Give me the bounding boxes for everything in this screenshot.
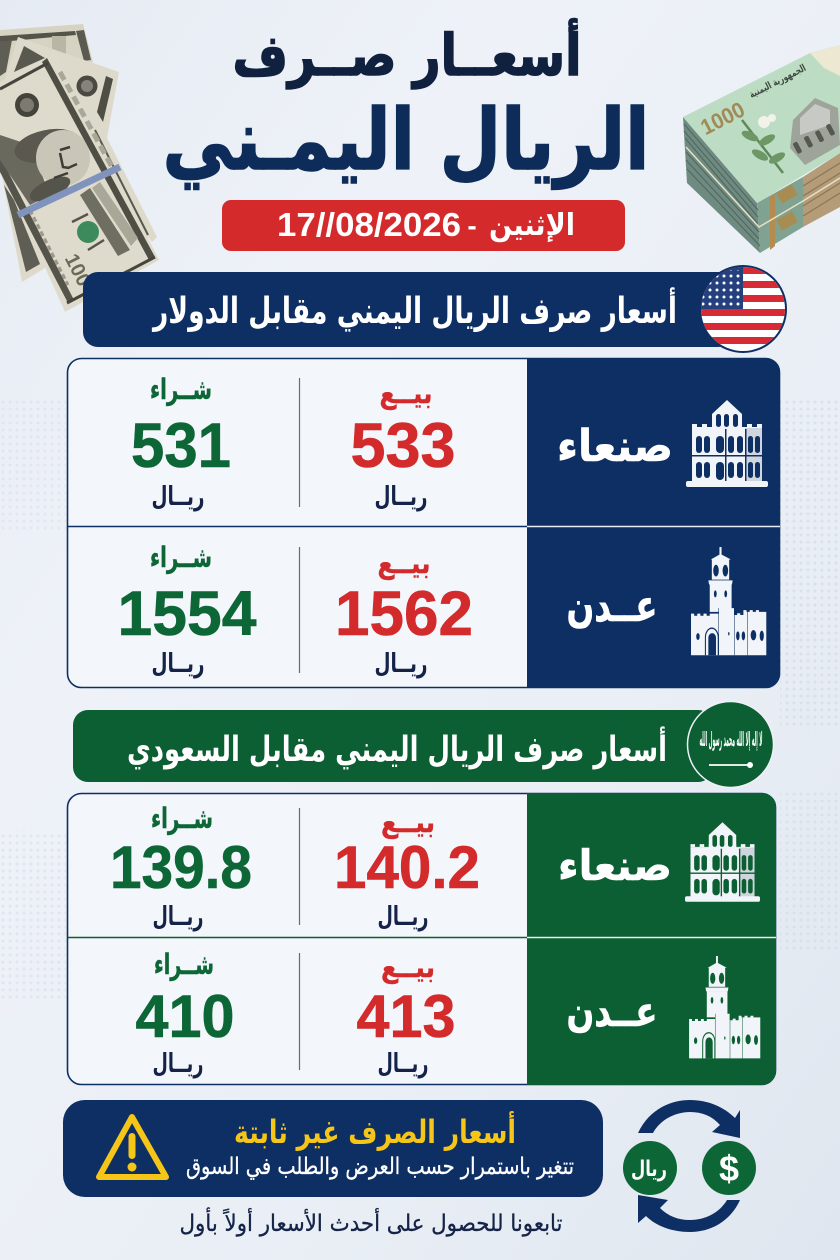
unit: buy: ريــال: [152, 482, 204, 512]
unit: sell: ريــال: [378, 902, 428, 932]
unit: buy: ريــال: [152, 649, 204, 679]
city: aden: عــدن: [566, 987, 658, 1036]
circle: riyal: ريال: [631, 1157, 667, 1182]
unit: sell: ريــال: [374, 649, 428, 679]
city: sanaa: صنعاء: [558, 841, 672, 890]
circle: dollar: $: [719, 1148, 739, 1189]
image: dollar banknotes: 100: [60, 250, 95, 290]
value: sell: 1562: [335, 579, 473, 649]
image: yemeni rial banknote stack: الجمهورية اليمنية: [748, 63, 808, 101]
value: buy: 531: [131, 411, 231, 481]
label: sell: بيــع: [381, 951, 435, 984]
title: line two: الريال اليمـني: [162, 91, 650, 190]
unit: sell: ريــال: [378, 1049, 428, 1079]
date number: 17//08/2026: [277, 206, 461, 243]
panel: dollar rates table: [68, 358, 780, 688]
value: buy: 1554: [118, 579, 256, 649]
icon: aden castle: [689, 956, 760, 1058]
value: buy: 410: [136, 983, 234, 1050]
label: buy: شــراء: [150, 541, 212, 574]
unit: sell: ريــال: [374, 482, 428, 512]
label: buy: شــراء: [151, 802, 213, 835]
row: aden sar: [136, 948, 760, 1079]
panel header: saudi riyal: [73, 710, 713, 782]
image: yemeni rial banknote stack: 1000: [696, 97, 749, 140]
label: buy: شــراء: [150, 373, 212, 406]
value: sell: 413: [356, 983, 456, 1050]
label: sell: بيــع: [378, 547, 430, 580]
image: yemeni rial banknote stack: [683, 45, 840, 253]
icon: warning triangle: [99, 1117, 166, 1177]
row: aden usd: [118, 541, 766, 679]
date weekday: الإثنين: [489, 208, 575, 243]
label: buy: شــراء: [154, 948, 214, 981]
label: sell: بيــع: [381, 806, 435, 839]
header text: saudi: أسعار صرف الريال اليمني مقابل السعودي: [127, 726, 667, 770]
unit: buy: ريــال: [152, 902, 204, 932]
date pill: [222, 200, 625, 251]
image: dollar banknotes: [0, 24, 159, 312]
value: buy: 139.8: [110, 834, 252, 901]
panel: saudi rates table: [68, 793, 776, 1085]
label: sell: بيــع: [380, 377, 432, 410]
value: sell: 533: [350, 411, 456, 481]
city: aden: عــدن: [566, 581, 658, 632]
callout: rates not fixed: [63, 1100, 603, 1197]
panel header: dollar: [83, 272, 733, 347]
icon: us flag: [699, 265, 787, 353]
row: sanaa usd: [131, 373, 768, 512]
icon: currency exchange cycle: [623, 1100, 756, 1232]
icon: aden castle: [691, 547, 766, 655]
footer text: تابعونا للحصول على أحدث الأسعار أولاً بأول: [180, 1207, 562, 1237]
callout heading: أسعار الصرف غير ثابتة: [234, 1111, 516, 1151]
unit: buy: ريــال: [152, 1049, 204, 1079]
icon: sanaa building: [686, 400, 768, 487]
city: sanaa: صنعاء: [557, 421, 673, 472]
value: sell: 140.2: [334, 834, 480, 901]
title: line one: أسعــار صــرف: [232, 18, 582, 89]
row: sanaa sar: [110, 802, 760, 932]
icon: sanaa building: [685, 822, 760, 902]
date dash: -: [467, 210, 477, 241]
icon: saudi flag: [688, 702, 774, 788]
callout text: تتغير باستمرار حسب العرض والطلب في السوق: [186, 1154, 574, 1180]
